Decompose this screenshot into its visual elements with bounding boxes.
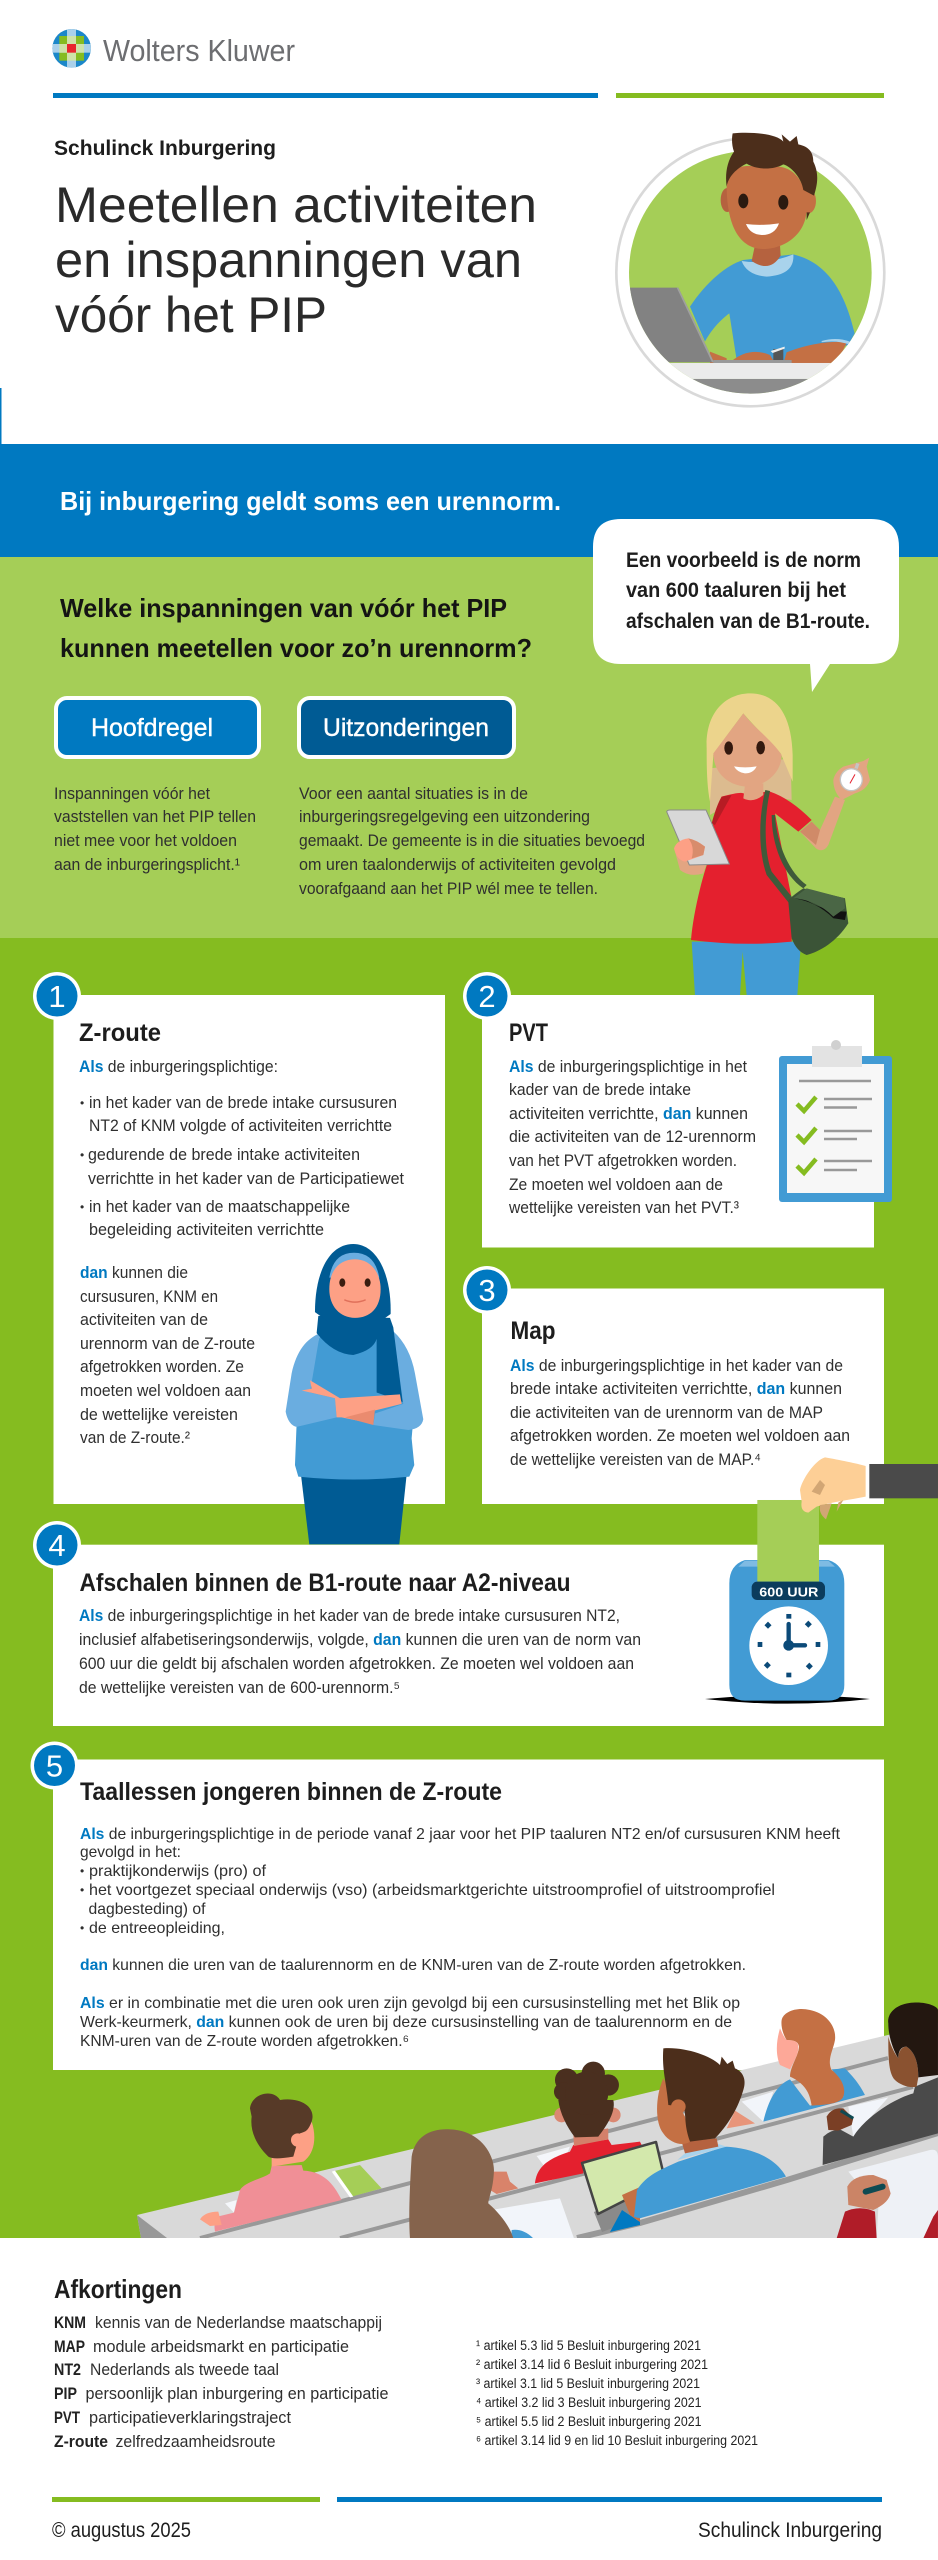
panel: 1 Z-route xyxy=(33,972,445,1504)
list: abbreviations: kennis van de Nederlandse maatschappij xyxy=(95,2314,382,2332)
body text: gevolgd in het: xyxy=(80,1844,181,1861)
list: abbreviations: KNM xyxy=(54,2314,86,2332)
text: uitzonderingen: om uren taalonderwijs of activiteiten gevolgd xyxy=(299,856,616,874)
icon: globe xyxy=(52,29,91,68)
panel: 5 Taallessen xyxy=(30,1742,884,2070)
heading: Z-route xyxy=(79,1019,161,1047)
body text: in het kader van de brede intake cursusuren xyxy=(89,1094,397,1112)
footnotes: ¹ artikel 5.3 lid 5 Besluit inburgering 2021 xyxy=(476,2338,701,2353)
body text: • xyxy=(80,1921,84,1935)
text: hoofdregel: niet mee voor het voldoen xyxy=(54,832,237,850)
question heading: kunnen meetellen voor zo’n urennorm? xyxy=(60,633,532,663)
body text xyxy=(79,1607,641,1697)
body text: Als er in combinatie met die uren ook uren zijn gevolgd bij een cursusinstelling met het Blik op xyxy=(80,1995,740,2012)
clock face xyxy=(749,1606,828,1685)
body text: Ze moeten wel voldoen aan de xyxy=(509,1176,723,1194)
body text: afgetrokken worden. Ze moeten wel voldoen aan xyxy=(510,1427,850,1445)
number badge 4 xyxy=(33,1521,81,1569)
text: hoofdregel: aan de inburgeringsplicht.¹ xyxy=(54,856,240,874)
text: uitzonderingen: voorafgaand aan het PIP wél mee te tellen. xyxy=(299,880,598,898)
label 600 UUR: 600 UUR xyxy=(759,1584,819,1599)
number badge 2 xyxy=(463,972,511,1020)
illustration: classroom xyxy=(137,2003,938,2239)
bottom rule lines xyxy=(52,2497,882,2502)
illustration: time clock with hand xyxy=(705,1457,938,1704)
button: Hoofdregel: Hoofdregel xyxy=(91,714,213,742)
body text: brede intake activiteiten verrichtte, dan kunnen xyxy=(510,1380,842,1398)
footnotes: ² artikel 3.14 lid 6 Besluit inburgering 2021 xyxy=(476,2357,708,2372)
body text: urennorm van de Z-route xyxy=(80,1335,255,1353)
list: abbreviations: NT2 xyxy=(54,2361,81,2379)
body text: dagbesteding) of xyxy=(88,1901,206,1918)
student: orange hair xyxy=(727,2009,865,2128)
panel: 4 Afschalen xyxy=(33,1521,884,1726)
number badge 4: 4 xyxy=(48,1528,66,1563)
machine body xyxy=(729,1560,844,1701)
student: long hair xyxy=(409,2129,574,2238)
student: front blue shirt xyxy=(634,2048,786,2218)
body text: • xyxy=(80,1096,84,1110)
text: uitzonderingen: inburgeringsregelgeving een uitzondering xyxy=(299,808,590,826)
body text: praktijkonderwijs (pro) of xyxy=(89,1863,267,1880)
body text: activiteiten verrichtte, dan kunnen xyxy=(509,1105,748,1123)
list: abbreviations: Nederlands als tweede taal xyxy=(90,2361,279,2379)
list: abbreviations xyxy=(54,2314,388,2451)
heading: Map xyxy=(510,1317,556,1345)
body text: Werk-keurmerk, dan kunnen ook de uren bij deze cursusinstelling van de taalurennorm en de xyxy=(80,2014,732,2031)
band: blue xyxy=(0,444,938,557)
body text: de wettelijke vereisten xyxy=(80,1406,238,1424)
body text: 600 uur die geldt bij afschalen worden afgetrokken. Ze moeten wel voldoen aan xyxy=(79,1655,634,1673)
body text: cursusuren, KNM en xyxy=(80,1288,218,1306)
heading: Afschalen binnen de B1-route naar A2-niveau xyxy=(80,1569,570,1597)
list: abbreviations: MAP xyxy=(54,2338,85,2356)
sleeve xyxy=(869,1464,938,1498)
body text: • xyxy=(80,1200,84,1214)
question heading xyxy=(60,593,532,663)
list: abbreviations: persoonlijk plan inburgering en participatie xyxy=(86,2385,388,2403)
illustration: woman with stopwatch xyxy=(667,693,870,996)
body text: Als de inburgeringsplichtige: xyxy=(79,1058,278,1076)
body text: de entreeopleiding, xyxy=(89,1920,225,1937)
title: vóór het PIP xyxy=(55,287,327,343)
number badge 2: 2 xyxy=(478,979,496,1014)
band: light green xyxy=(0,557,938,938)
top rule lines xyxy=(53,93,884,98)
footnotes: ⁴ artikel 3.2 lid 3 Besluit inburgering 2021 xyxy=(476,2395,702,2410)
body text: kader van de brede intake xyxy=(509,1081,691,1099)
body text: activiteiten van de xyxy=(80,1311,208,1329)
left edge mark xyxy=(0,388,2,444)
laptop xyxy=(582,2142,665,2232)
body text: KNM-uren van de Z-route worden afgetrokken.⁶ xyxy=(80,2033,409,2050)
speech bubble: Een voorbeeld is de norm xyxy=(626,549,861,572)
heading: Taallessen jongeren binnen de Z-route xyxy=(80,1778,502,1806)
body text: van het PVT afgetrokken worden. xyxy=(509,1152,737,1170)
number badge 5: 5 xyxy=(46,1748,63,1784)
button: Uitzonderingen: Uitzonderingen xyxy=(323,714,489,742)
wordmark: Wolters Kluwer xyxy=(103,33,295,68)
speech bubble: van 600 taaluren bij het xyxy=(626,579,846,602)
number badge 5 xyxy=(30,1742,78,1790)
body text xyxy=(510,1357,850,1469)
body text: de wettelijke vereisten van de MAP.⁴ xyxy=(510,1451,761,1469)
illustration: woman with headscarf xyxy=(286,1244,423,1544)
text: uitzonderingen xyxy=(299,785,645,898)
card slot xyxy=(738,1561,835,1567)
body text: • xyxy=(80,1864,84,1878)
footnotes xyxy=(476,2338,758,2448)
question heading: Welke inspanningen van vóór het PIP xyxy=(60,593,507,623)
button: Uitzonderingen xyxy=(299,698,514,757)
student: red shirt xyxy=(490,2062,642,2194)
body text xyxy=(79,1058,404,1447)
body text: in het kader van de maatschappelijke xyxy=(89,1198,350,1216)
body text: Als de inburgeringsplichtige in het xyxy=(509,1058,747,1076)
body text: dan kunnen die uren van de taalurennorm en de KNM-uren van de Z-route worden afgetrokken. xyxy=(80,1957,746,1974)
illustration: man at laptop xyxy=(610,133,910,409)
panel: 2 PVT xyxy=(463,972,874,1248)
body text: NT2 of KNM volgde of activiteiten verrichtte xyxy=(89,1117,392,1135)
number badge 3: 3 xyxy=(478,1273,496,1308)
heading: PVT xyxy=(509,1019,548,1047)
brand label: Schulinck Inburgering xyxy=(54,137,276,160)
body text: inclusief alfabetiseringsonderwijs, volgde, dan kunnen die uren van de norm van xyxy=(79,1631,641,1649)
body text: Als de inburgeringsplichtige in de periode vanaf 2 jaar voor het PIP taaluren NT2 en/of cursusuren KNM heeft xyxy=(80,1826,841,1843)
text: hoofdregel: Inspanningen vóór het xyxy=(54,785,210,803)
text: uitzonderingen: Voor een aantal situaties is in de xyxy=(299,785,528,803)
body text: de wettelijke vereisten van de 600-urennorm.⁵ xyxy=(79,1679,400,1697)
body text xyxy=(508,1058,756,1217)
body text: het voortgezet speciaal onderwijs (vso) (arbeidsmarktgerichte uitstroomprofiel of uitstroomprofiel xyxy=(89,1882,775,1899)
text: hoofdregel: vaststellen van het PIP tellen xyxy=(54,808,256,826)
desks xyxy=(137,2023,938,2238)
title: en inspanningen van xyxy=(55,232,522,288)
footnotes: ⁶ artikel 3.14 lid 9 en lid 10 Besluit inburgering 2021 xyxy=(476,2433,758,2448)
machine shadow xyxy=(705,1695,870,1704)
panel: 3 Map xyxy=(463,1266,884,1504)
body text: verrichtte in het kader van de Participatiewet xyxy=(88,1170,404,1188)
body text: Als de inburgeringsplichtige in het kader van de xyxy=(510,1357,843,1375)
student: front writing hand xyxy=(837,2150,938,2239)
footer: date: © augustus 2025 xyxy=(52,2519,191,2542)
body text: • xyxy=(80,1148,84,1162)
intro sentence: Bij inburgering geldt soms een urennorm. xyxy=(60,486,561,516)
number badge 3 xyxy=(463,1266,511,1314)
body text: gedurende de brede intake activiteiten xyxy=(88,1146,360,1164)
list: abbreviations: participatieverklaringstraject xyxy=(89,2409,291,2427)
list: abbreviations: zelfredzaamheidsroute xyxy=(116,2433,276,2451)
list: abbreviations: module arbeidsmarkt en participatie xyxy=(93,2338,349,2356)
speech bubble xyxy=(593,519,899,692)
logo: Wolters Kluwer xyxy=(52,29,295,68)
body text: wettelijke vereisten van het PVT.³ xyxy=(508,1199,739,1217)
student: dark jacket xyxy=(823,2003,938,2165)
icon: clipboard checklist xyxy=(779,1040,892,1202)
body text: die activiteiten van de 12-urennorm xyxy=(509,1128,756,1146)
text: uitzonderingen: gemaakt. De gemeente is in die situaties bevoegd xyxy=(299,832,645,850)
card xyxy=(757,1500,819,1582)
body text: moeten wel voldoen aan xyxy=(80,1382,251,1400)
student: pink top xyxy=(200,2094,382,2232)
body text: van de Z-route.² xyxy=(80,1429,190,1447)
body text: begeleiding activiteiten verrichtte xyxy=(89,1221,324,1239)
body text: Als de inburgeringsplichtige in het kader van de brede intake cursusuren NT2, xyxy=(79,1607,620,1625)
body text: • xyxy=(80,1883,84,1897)
hand xyxy=(800,1457,866,1513)
title: Meetellen activiteiten xyxy=(55,177,537,233)
list: abbreviations: PIP xyxy=(54,2385,77,2403)
number badge 1: 1 xyxy=(48,979,66,1014)
body text: afgetrokken worden. Ze xyxy=(80,1358,244,1376)
label 600 UUR xyxy=(752,1582,825,1600)
band: dark green xyxy=(0,938,938,2238)
list: abbreviations: PVT xyxy=(54,2409,80,2427)
body text xyxy=(80,1826,841,2050)
number badge 1 xyxy=(33,972,81,1020)
button: Hoofdregel xyxy=(56,698,259,757)
footer: brand: Schulinck Inburgering xyxy=(698,2519,882,2542)
title xyxy=(55,177,537,343)
heading: abbreviations: Afkortingen xyxy=(54,2274,182,2304)
footnotes: ⁵ artikel 5.5 lid 2 Besluit inburgering 2021 xyxy=(476,2414,702,2429)
text: hoofdregel xyxy=(54,785,256,874)
list: abbreviations: Z-route xyxy=(54,2433,108,2451)
body text: die activiteiten van de urennorm van de MAP xyxy=(510,1404,823,1422)
footnotes: ³ artikel 3.1 lid 5 Besluit inburgering 2021 xyxy=(476,2376,700,2391)
speech bubble: afschalen van de B1-route. xyxy=(626,610,870,633)
body text: dan kunnen die xyxy=(80,1264,188,1282)
